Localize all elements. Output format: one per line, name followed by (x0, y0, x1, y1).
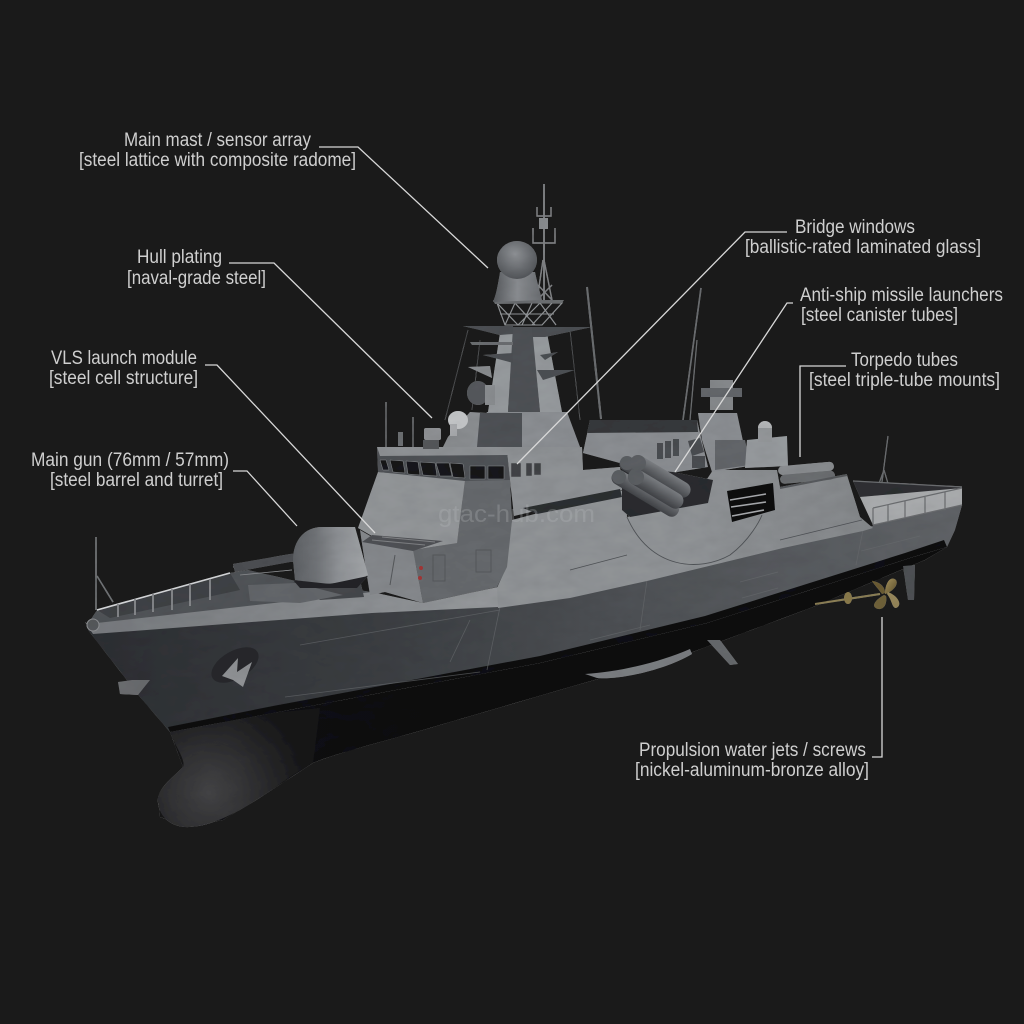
aft superstructure (583, 420, 708, 478)
turret collar (293, 576, 368, 588)
light side plating (497, 470, 873, 608)
label: main mast: Main mast / sensor array (124, 130, 311, 151)
radar arms (463, 326, 592, 380)
anti-ship missile canisters (609, 452, 694, 519)
dark stripe (523, 489, 622, 514)
red marker lights (418, 566, 423, 580)
gun housing wall (360, 530, 423, 603)
bulwark and rail (97, 560, 293, 618)
radome dome (497, 241, 537, 279)
label: propulsion (635, 617, 882, 781)
hull panel seams (285, 530, 920, 697)
deck edge lip (85, 587, 498, 634)
label: propulsion: [nickel-aluminum-bronze alloy] (635, 760, 869, 781)
rear tower (698, 413, 755, 472)
service doors (390, 550, 491, 585)
rudder (903, 565, 915, 600)
propeller and shaft (815, 578, 899, 609)
launcher bay (622, 468, 713, 517)
bulbous bow (158, 708, 320, 827)
label: anti-ship missile launchers (675, 285, 1003, 472)
label: hull plating: [naval-grade steel] (127, 268, 266, 289)
ship illustration (85, 184, 962, 827)
sonar dome (585, 649, 692, 678)
boot line (168, 540, 947, 732)
foredeck (88, 570, 372, 624)
label: torpedo tubes (800, 350, 1000, 457)
label: main mast (79, 130, 488, 268)
label: hull plating: Hull plating (137, 247, 222, 268)
label: bridge windows: Bridge windows (795, 217, 915, 238)
keel / underwater hull (158, 547, 947, 827)
gun barrel (233, 552, 313, 572)
curved side seam (570, 515, 862, 570)
VLS opening (727, 483, 775, 522)
label: main mast: [steel lattice with composite radome] (79, 150, 356, 171)
bridge block lower (358, 472, 465, 550)
aft dome (758, 421, 772, 442)
label: VLS launch module (49, 348, 375, 533)
label: bridge windows (517, 217, 981, 464)
rear sensor mount (701, 380, 742, 410)
anchor (205, 640, 265, 690)
watermark: gtac-hub.com (438, 501, 595, 528)
gun wedge base (248, 583, 343, 603)
jack staff (96, 537, 113, 610)
label: anti-ship missile launchers: [steel canister tubes] (801, 305, 958, 326)
label: VLS launch module: VLS launch module (51, 348, 197, 369)
label: torpedo tubes: Torpedo tubes (851, 350, 958, 371)
label: anti-ship missile launchers: Anti-ship missile launchers (800, 285, 1003, 306)
bridge roof equipment (398, 411, 487, 449)
bridge roof (377, 447, 580, 456)
bridge window band (377, 447, 510, 481)
label: main gun: Main gun (76mm / 57mm) (31, 450, 229, 471)
stabiliser fin (707, 640, 738, 665)
label: hull plating (127, 247, 432, 418)
radome platform (493, 300, 564, 304)
aft mid block (745, 436, 788, 468)
label: VLS launch module: [steel cell structure] (49, 368, 198, 389)
bridge windows (380, 460, 541, 479)
label: propulsion: Propulsion water jets / screws (639, 740, 866, 761)
tower light sides (488, 333, 513, 412)
label: bridge windows: [ballistic-rated laminated glass] (745, 237, 981, 258)
torpedo tubes (778, 461, 847, 488)
label: main gun: [steel barrel and turret] (50, 470, 223, 491)
side radar director (467, 381, 495, 405)
tower base (470, 412, 580, 447)
helicopter deck back (853, 481, 962, 497)
main lattice antenna mast (533, 184, 555, 300)
hawsepipe (87, 619, 99, 631)
aft windows (657, 438, 705, 468)
lattice support (497, 303, 562, 325)
label: main gun (31, 450, 297, 526)
radome cone (493, 272, 542, 302)
rear mast antennas (386, 287, 892, 497)
gun pedestal (293, 580, 364, 600)
tower dark center (508, 327, 540, 412)
label: torpedo tubes: [steel triple-tube mounts] (809, 370, 1000, 391)
right bridge wall (507, 447, 623, 516)
bow fitting (118, 680, 150, 695)
middle dark panel (413, 480, 512, 603)
main dark hull (88, 505, 962, 732)
deck rail (853, 481, 962, 525)
helicopter deck (860, 488, 962, 525)
VLS deck hatches (362, 535, 443, 551)
turret (293, 527, 368, 584)
